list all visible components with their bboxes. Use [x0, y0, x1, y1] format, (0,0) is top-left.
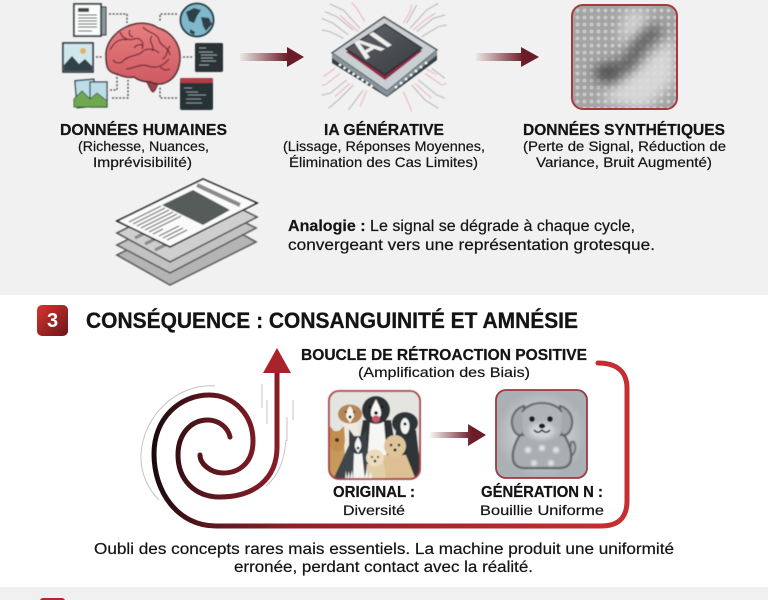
text block: generative AI	[283, 120, 485, 170]
dog face	[529, 416, 553, 432]
icon: next section badge	[40, 598, 65, 600]
dog small beige	[365, 450, 386, 480]
spiral and return path	[154, 363, 627, 526]
text block: generative AI: (Lissage, Réponses Moyennes,	[283, 138, 485, 154]
dog right black	[391, 412, 420, 478]
dog tan right	[380, 435, 416, 480]
icon: text document	[74, 4, 106, 36]
arrow: AI to synthetic	[476, 47, 539, 67]
icon: landscape picture	[63, 43, 93, 72]
icon: terminal	[195, 43, 223, 72]
icon: photo stack	[74, 79, 107, 108]
dog brown	[338, 404, 362, 450]
text block: human data	[60, 120, 227, 170]
icon: human data brain cluster	[63, 4, 223, 110]
dog husky	[334, 429, 369, 479]
icon: section number badge 3: 3	[47, 310, 58, 332]
arrow: humans to AI	[240, 47, 304, 67]
grass	[345, 470, 372, 479]
heading: consequence: CONSÉQUENCE : CONSANGUINITÉ ET AMNÉSIE	[86, 308, 578, 333]
text block: original: Diversité	[343, 502, 405, 518]
text block: conclusion: erronée, perdant contact avec la réalité.	[234, 559, 533, 576]
text block: analogy: Analogie : Le signal se dégrade à chaque cycle,	[288, 218, 635, 235]
icon: globe	[180, 4, 214, 36]
text block: generative AI: Élimination des Cas Limites)	[289, 154, 478, 170]
icon: synthetic noise square	[572, 5, 677, 110]
body	[513, 435, 571, 468]
image: uniform blurred dog	[496, 390, 587, 478]
text block: synthetic data: (Perte de Signal, Réduction de	[523, 138, 726, 154]
text block: analogy	[288, 218, 655, 254]
icon: section number badge 3	[37, 305, 68, 336]
text block: feedback loop title: (Amplification des Biais)	[358, 364, 530, 380]
circuit traces	[322, 3, 447, 112]
label: AI: AI	[340, 27, 399, 64]
panel: next section background	[0, 587, 768, 600]
text block: analogy: convergeant vers une représentation grotesque.	[288, 237, 655, 254]
text block: synthetic data	[523, 120, 726, 170]
text block: human data: (Richesse, Nuances,	[78, 138, 209, 154]
arrow head	[263, 348, 291, 373]
dog tan left	[329, 426, 346, 480]
arrow: original to generation N	[430, 424, 486, 446]
text block: generation N: GÉNÉRATION N :	[481, 482, 603, 501]
text block: human data: DONNÉES HUMAINES	[60, 120, 227, 139]
chart: feedback spiral loop with arrow	[141, 348, 627, 526]
ears	[512, 406, 525, 435]
text block: synthetic data: DONNÉES SYNTHÉTIQUES	[523, 120, 725, 139]
text block: conclusion	[94, 541, 674, 576]
icon: AI chip	[322, 3, 447, 112]
text block: synthetic data: Variance, Bruit Augmenté)	[536, 154, 712, 170]
text block: feedback loop title: BOUCLE DE RÉTROACTION POSITIVE	[301, 345, 587, 364]
text block: generation N	[480, 482, 604, 518]
text block: generative AI: IA GÉNÉRATIVE	[324, 120, 444, 139]
panel: consequence background	[0, 295, 768, 587]
dog big center	[360, 396, 394, 456]
text block: human data: Imprévisibilité)	[93, 154, 192, 170]
panel: degradation cycle background	[0, 0, 768, 295]
text block: generation N: Bouillie Uniforme	[480, 502, 604, 518]
icon: stacked degraded newspapers	[117, 179, 257, 285]
chip body	[332, 50, 437, 97]
text block: original	[333, 484, 415, 518]
head	[522, 403, 562, 441]
tail	[565, 442, 575, 458]
text block: original: ORIGINAL :	[333, 484, 415, 501]
faint motion lines	[141, 384, 293, 500]
image: diverse dogs	[329, 391, 422, 480]
text block: feedback loop title	[301, 345, 587, 380]
icon: code editor	[180, 78, 213, 110]
text block: conclusion: Oubli des concepts rares mais essentiels. La machine produit une uniformité	[94, 541, 674, 558]
